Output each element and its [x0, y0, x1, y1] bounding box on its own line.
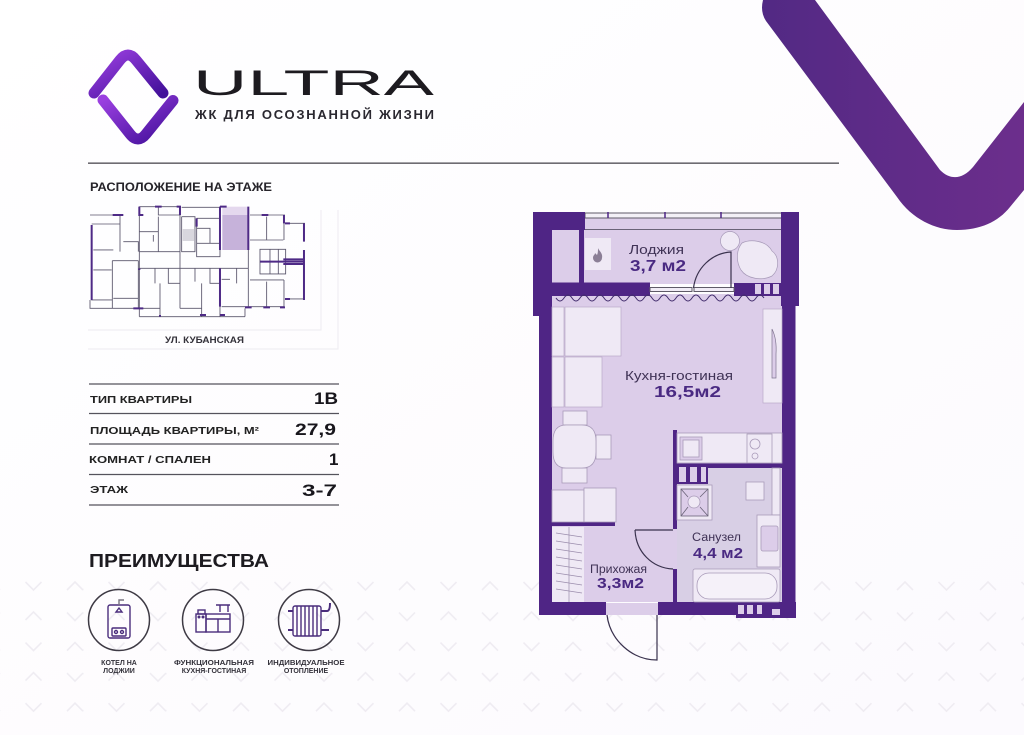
hall door	[635, 530, 673, 569]
row: floor	[90, 481, 337, 500]
curtain	[556, 295, 764, 301]
window to loggia	[650, 288, 734, 292]
icon: kitchen	[182, 590, 244, 650]
table rules	[89, 384, 339, 505]
hallway cabinets	[552, 488, 616, 522]
storage closet	[552, 230, 579, 282]
kitchen cabinets	[677, 433, 782, 463]
wardrobe	[552, 527, 584, 602]
row: rooms: КОМНАТ / СПАЛЕН	[89, 454, 211, 466]
sofa	[552, 307, 621, 407]
loggia glazing	[585, 212, 782, 230]
label: hallway: Прихожая	[590, 564, 647, 576]
row: rooms	[89, 450, 338, 469]
heating caption: ИНДИВИДУАЛЬНОЕ	[268, 660, 345, 667]
row: type: 1В	[314, 389, 338, 408]
row: floor: 3-7	[302, 481, 337, 500]
heating caption: ОТОПЛЕНИЕ	[284, 668, 329, 675]
label: loggia: 3,7 м2	[630, 258, 686, 275]
logo: ULTRA	[94, 55, 435, 139]
floor walls	[90, 207, 305, 317]
label: kitchen-living room	[625, 369, 733, 401]
label: hallway	[590, 564, 647, 592]
dining table and chairs	[553, 411, 611, 483]
row: area: ПЛОЩАДЬ КВАРТИРЫ, М²	[90, 425, 260, 437]
boiler caption: ЛОДЖИИ	[103, 668, 135, 675]
row: type	[90, 389, 338, 408]
apartment parameters table	[89, 384, 339, 505]
logo wordmark: ULTRA	[193, 64, 435, 103]
label: hallway: 3,3м2	[597, 575, 644, 592]
row: area	[90, 420, 336, 439]
kitchen caption: КУХНЯ-ГОСТИНАЯ	[182, 668, 246, 675]
TV unit	[763, 309, 782, 403]
floors	[552, 218, 782, 284]
row: floor: ЭТАЖ	[90, 484, 129, 496]
row: area: 27,9	[295, 420, 336, 439]
logo tagline: ЖК ДЛЯ ОСОЗНАННОЙ ЖИЗНИ	[194, 107, 434, 122]
advantage: heating	[268, 590, 345, 675]
highlighted apartment	[222, 207, 248, 250]
site boundary	[88, 210, 338, 349]
advantage: boiler	[88, 590, 150, 675]
label: loggia: Лоджия	[629, 242, 684, 257]
icon: boiler	[88, 590, 150, 650]
label: loggia	[629, 242, 686, 275]
row: rooms: 1	[329, 450, 338, 469]
label: bathroom: 4,4 м2	[693, 545, 743, 562]
vent shafts	[679, 284, 780, 615]
walls	[533, 212, 799, 618]
loggia boiler	[585, 238, 611, 270]
bathroom fixtures	[677, 468, 780, 602]
street label: УЛ. КУБАНСКАЯ	[165, 335, 244, 345]
loggia door	[694, 252, 731, 288]
advantage: kitchen	[174, 590, 254, 675]
stairwell lines	[183, 230, 194, 240]
label: bathroom: Санузел	[692, 532, 741, 544]
heading: advantages: ПРЕИМУЩЕСТВА	[89, 551, 269, 571]
kitchen caption: ФУНКЦИОНАЛЬНАЯ	[174, 660, 254, 667]
logo mark	[94, 55, 173, 139]
header divider	[88, 162, 839, 164]
boiler caption: КОТЕЛ НА	[101, 660, 137, 667]
row: type: ТИП КВАРТИРЫ	[90, 394, 192, 406]
label: kitchen-living room: Кухня-гостиная	[625, 369, 733, 383]
label: kitchen-living room: 16,5м2	[654, 384, 721, 401]
label: bathroom	[692, 532, 743, 562]
accent walls	[92, 207, 304, 317]
decorative swoosh top right	[762, 0, 1024, 230]
loggia furniture	[720, 232, 778, 279]
apartment floor plan	[533, 212, 799, 660]
floor key plan	[88, 207, 338, 349]
icon: radiator	[278, 590, 340, 650]
heading: floor location: РАСПОЛОЖЕНИЕ НА ЭТАЖЕ	[90, 182, 272, 194]
entrance door	[606, 603, 658, 660]
room labels	[590, 242, 743, 592]
